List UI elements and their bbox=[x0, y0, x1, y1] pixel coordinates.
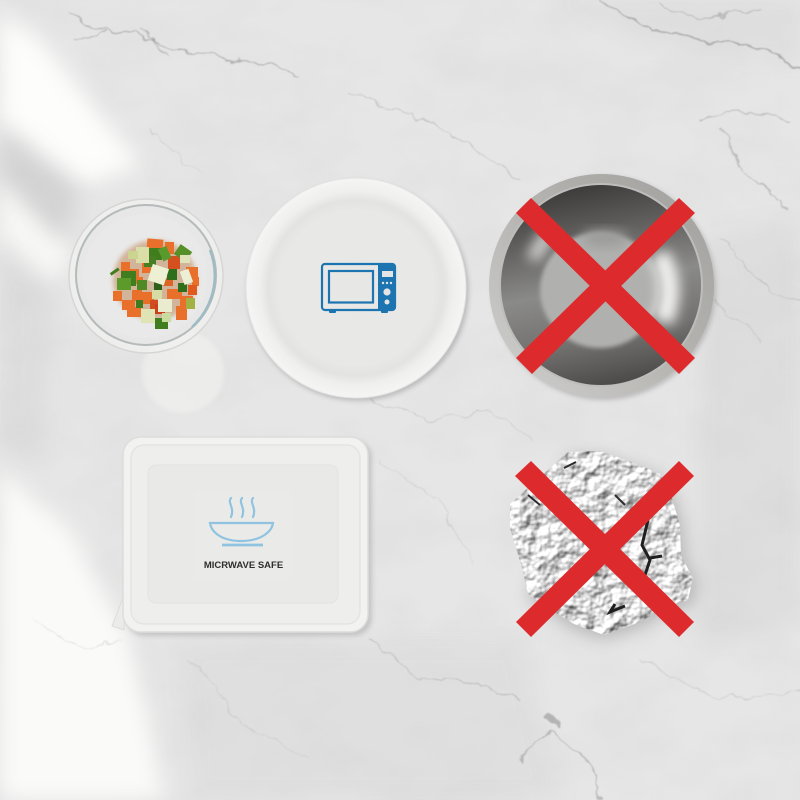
label: MICRWAVE SAFE bbox=[204, 560, 283, 571]
icon: steaming bowl bbox=[210, 498, 273, 545]
icon: microwave bbox=[322, 263, 396, 313]
sunlight patches bbox=[0, 15, 165, 800]
plate shadow bbox=[247, 181, 469, 401]
glass bowl with mixed vegetables bbox=[69, 199, 225, 414]
stainless steel bowl, crossed out bbox=[489, 174, 716, 400]
red cross bbox=[515, 461, 694, 637]
bowl shadow bbox=[141, 330, 225, 414]
plate with microwave icon bbox=[246, 178, 469, 401]
vegetables bbox=[110, 238, 199, 329]
crumpled aluminium foil, crossed out bbox=[500, 445, 700, 645]
plastic food container with lid bbox=[112, 437, 372, 636]
red cross bbox=[516, 198, 695, 374]
